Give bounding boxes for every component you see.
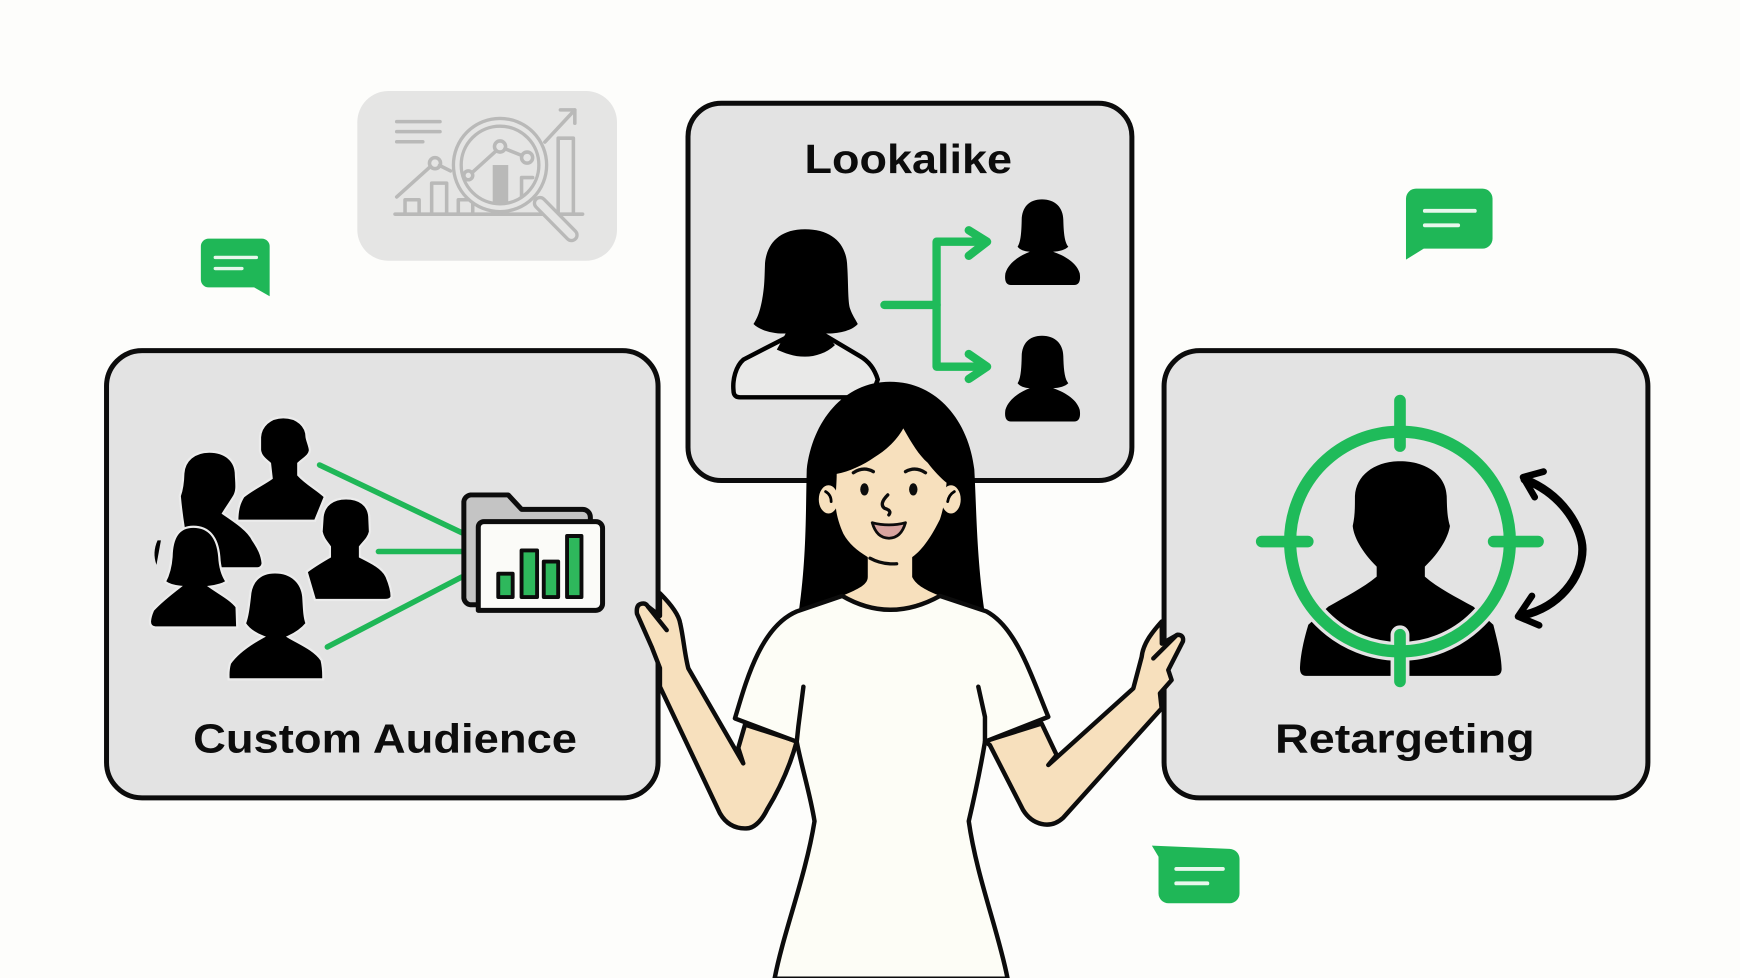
facial features (853, 469, 925, 564)
ears (817, 484, 962, 515)
icon: source person (733, 229, 878, 397)
panel: Retargeting (1164, 351, 1648, 798)
icon: loop arrows (1518, 472, 1582, 625)
dress (735, 596, 1048, 978)
icon: lookalike person bottom (1005, 336, 1080, 421)
heading: Retargeting: Retargeting (1275, 715, 1535, 761)
right arm (985, 621, 1183, 825)
left arm (637, 593, 797, 828)
icon: green crosshair (1262, 401, 1538, 684)
panel: analytics ghost card (357, 91, 617, 261)
chat bubble: top right (1406, 189, 1493, 260)
neck (842, 549, 940, 613)
panel: Lookalike (688, 103, 1132, 481)
dress arm seams (797, 687, 985, 742)
lines: green connectors (320, 465, 462, 647)
chat bubble: bottom (1152, 846, 1240, 903)
face (836, 428, 947, 564)
icon: lookalike person top (1005, 199, 1080, 285)
arrows: green branch (884, 230, 987, 379)
figure: presenter woman (637, 382, 1183, 978)
hair (799, 382, 984, 610)
icon: audience group (150, 417, 392, 679)
heading: Custom Audience: Custom Audience (193, 715, 577, 761)
icon: folder with bar chart (464, 495, 603, 610)
panel: Custom Audience (107, 351, 658, 798)
chat bubble: left (201, 239, 270, 296)
heading: Lookalike: Lookalike (805, 136, 1012, 182)
icon: target person (1300, 461, 1502, 676)
